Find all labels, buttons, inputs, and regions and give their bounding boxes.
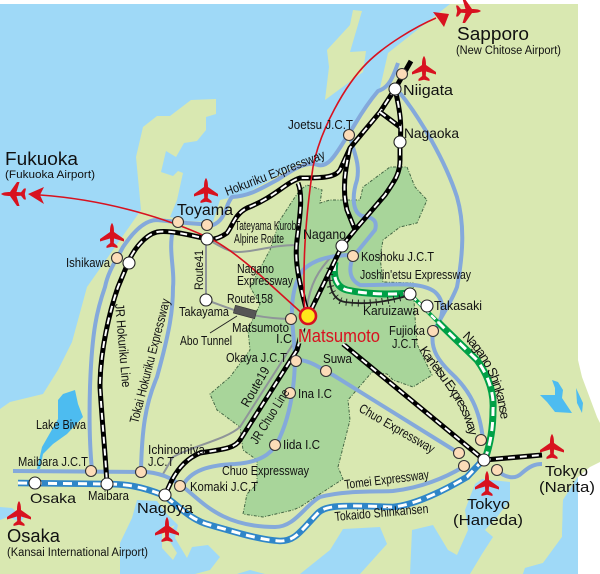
island: Sado: [325, 10, 366, 100]
city and junction labels: Ina I.C: [298, 386, 332, 401]
city and junction labels: Suwa: [323, 351, 353, 366]
title: Matsumoto label: Matsumoto: [298, 326, 380, 346]
city and junction labels: Tateyama Kurobe: [235, 219, 301, 233]
airport labels: (Fukuoka Airport): [5, 169, 95, 181]
city and junction labels: Chuo Expressway: [222, 463, 309, 478]
city and junction labels: Okaya J.C.T: [226, 350, 287, 365]
city and junction labels: Karuizawa: [363, 303, 420, 318]
city and junction labels: Expressway: [237, 273, 293, 288]
city and junction labels: Nagano: [237, 261, 274, 276]
rotated route labels: Tokaido Shinkansen: [334, 501, 429, 524]
city and junction labels: Takayama: [179, 304, 230, 319]
rotated route labels: JR Hokuriku Line: [112, 303, 134, 388]
city and junction labels: Niigata: [403, 82, 454, 99]
city and junction labels: Alpine Route: [234, 232, 284, 246]
airport labels: Osaka: [7, 526, 61, 546]
airport labels: Tokyo: [467, 496, 510, 513]
rotated route labels: Hokuriku Expressway: [223, 147, 327, 199]
airport labels: (New Chitose Airport): [456, 45, 561, 57]
city and junction labels: J.C.T: [148, 454, 174, 469]
city and junction labels: Abo Tunnel: [180, 333, 232, 348]
Hokuriku Shinkansen (green): [334, 262, 410, 294]
airport labels: Tokyo: [545, 463, 588, 480]
rotated route labels: JR Chuo Line: [247, 386, 292, 447]
rotated route labels: Route41: [192, 250, 206, 290]
rotated route labels: Kan'etsu Expressway: [420, 346, 476, 434]
city and junction labels: Fujioka: [389, 323, 426, 338]
rotated route labels: Tokai Hokuriku Expressway: [126, 297, 173, 425]
city and junction labels: Maibara: [88, 488, 130, 503]
Shinano Railway (ticked line): [330, 268, 407, 303]
city and junction labels: Ichinomiya: [148, 442, 206, 457]
city and junction labels: Nagoya: [137, 500, 194, 517]
city and junction labels: Koshoku J.C.T: [361, 249, 434, 264]
airport labels: Fukuoka: [5, 149, 79, 169]
city and junction labels: J.C.T: [392, 336, 418, 351]
JR rail lines: [100, 61, 542, 495]
rotated route labels: [112, 147, 508, 524]
city and junction labels: Lake Biwa: [36, 417, 87, 432]
grey national routes: [163, 239, 333, 474]
city and junction labels: Maibara J.C.T: [18, 454, 88, 469]
airport labels: (Kansai International Airport): [7, 547, 148, 559]
rotated route labels: Route19: [238, 364, 273, 410]
city and junction labels: Iida I.C: [283, 437, 320, 452]
Tokaido Shinkansen line: [18, 460, 483, 541]
rotated route labels: Tomei Expressway: [344, 467, 430, 492]
airport labels: (Narita): [539, 479, 595, 496]
city and junction labels: Nagano: [303, 226, 346, 242]
airport labels: (Haneda): [453, 512, 523, 529]
rotated route labels: Chuo Expressway: [356, 401, 438, 456]
city and junction labels: Joshin'etsu Expressway: [360, 267, 471, 282]
city and junction labels: Matsumoto: [232, 320, 289, 335]
red route: Fukuoka flight: [28, 187, 305, 316]
city and junction labels: Nagaoka: [404, 125, 459, 141]
stations: [29, 68, 502, 501]
Abo Tunnel leader and tunnel: [210, 305, 257, 333]
lakes: Kasumigaura: [540, 380, 583, 413]
city and junction labels: Komaki J.C.T: [190, 479, 258, 494]
city and junction labels: [18, 82, 482, 517]
Nagano Shinkansen (green): [412, 296, 493, 459]
city and junction labels: Route158: [227, 291, 273, 306]
bays and southern sea: [0, 478, 578, 574]
red route: Sapporo flight: [304, 12, 449, 316]
city and junction labels: Joetsu J.C.T: [288, 117, 353, 132]
Matsumoto marker: [300, 308, 316, 324]
panel: Nagano prefecture: [210, 167, 432, 517]
city and junction labels: Osaka: [30, 490, 76, 506]
lake: Biwa: [37, 390, 83, 469]
airport labels: Sapporo: [457, 24, 529, 44]
city and junction labels: I.C: [276, 331, 292, 346]
city and junction labels: Ishikawa: [66, 255, 111, 270]
expressways: [13, 63, 542, 527]
city and junction labels: Toyama: [177, 202, 233, 219]
city and junction labels: Takasaki: [434, 298, 482, 313]
